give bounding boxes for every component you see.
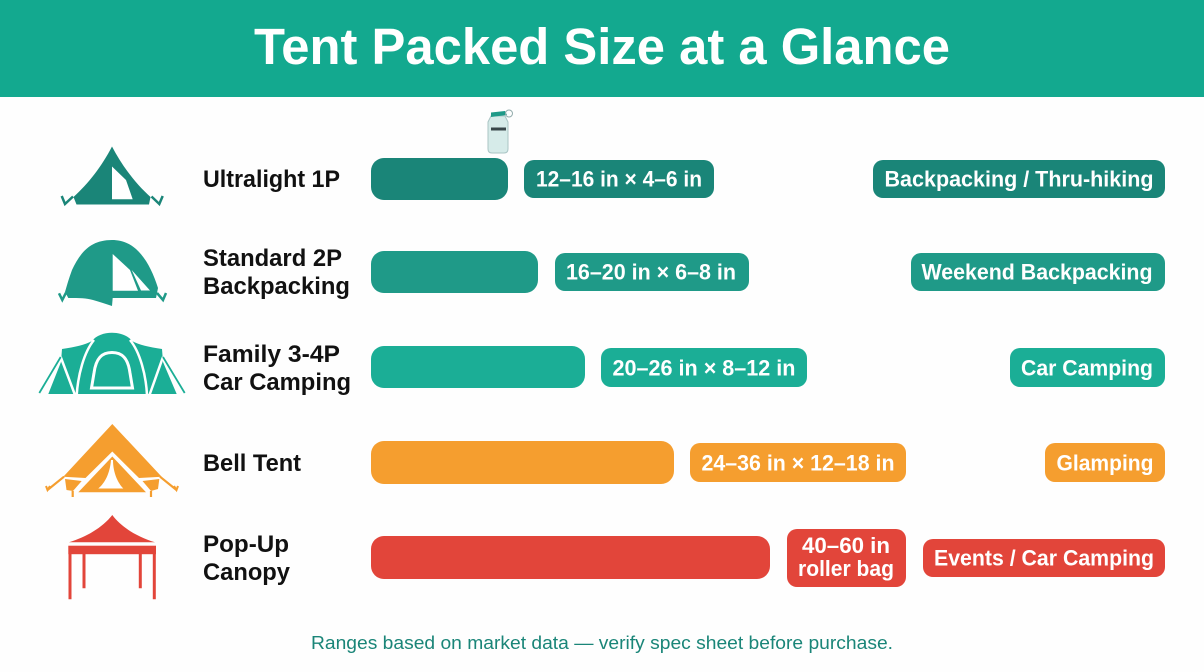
label: Family 3-4P [203,341,340,368]
use case pill [923,539,1165,577]
row: Standard 2P Backpacking [59,240,1165,306]
icon: water bottle [488,110,512,153]
use case pill [1045,443,1165,482]
icon: family tent [39,333,185,395]
packed size bar [371,536,770,579]
use case pill: Glamping [1056,450,1154,476]
footnote: Ranges based on market data — verify spec sheet before purchase. [311,633,893,653]
icon: bell tent [46,424,178,497]
use case pill: Weekend Backpacking [922,260,1152,284]
size pill [690,443,906,482]
title: Tent Packed Size at a Glance [254,18,950,75]
packed size bar [371,251,538,293]
row: Family 3-4P Car Camping: Car Camping [203,369,351,396]
size pill: 12–16 in × 4–6 in [536,166,702,192]
row: Pop-Up Canopy: Canopy [203,559,291,586]
label: Ultralight 1P [203,166,340,193]
use case pill [873,160,1165,198]
header banner [0,0,1204,97]
row: Ultralight 1P [62,110,1165,204]
label: Bell Tent [203,450,301,477]
packed size bar [371,346,585,388]
use case pill [911,253,1165,291]
size pill [787,529,906,587]
label: Pop-Up [203,531,289,558]
size pill: roller bag [798,556,894,581]
row: Bell Tent [46,424,1165,497]
size pill: 20–26 in × 8–12 in [612,356,796,380]
icon: ultralight tent [62,146,163,204]
packed size bar [371,158,508,200]
row: Standard 2P Backpacking: Backpacking [203,273,350,300]
size pill [524,160,714,198]
use case pill: Backpacking / Thru-hiking [884,166,1154,192]
size pill [555,253,749,291]
icon: canopy [68,515,156,599]
use case pill [1010,348,1165,387]
size pill [601,348,807,387]
label: Standard 2P [203,245,342,272]
size pill: 16–20 in × 6–8 in [566,260,736,284]
packed size bar [371,441,674,484]
icon: dome tent [59,240,166,306]
size pill: 40–60 in [802,533,890,558]
use case pill: Car Camping [1021,356,1153,380]
use case pill: Events / Car Camping [934,546,1154,570]
row: Pop-Up Canopy [68,515,1165,599]
row: Family 3-4P Car Camping [39,333,1165,396]
size pill: 24–36 in × 12–18 in [702,450,894,476]
